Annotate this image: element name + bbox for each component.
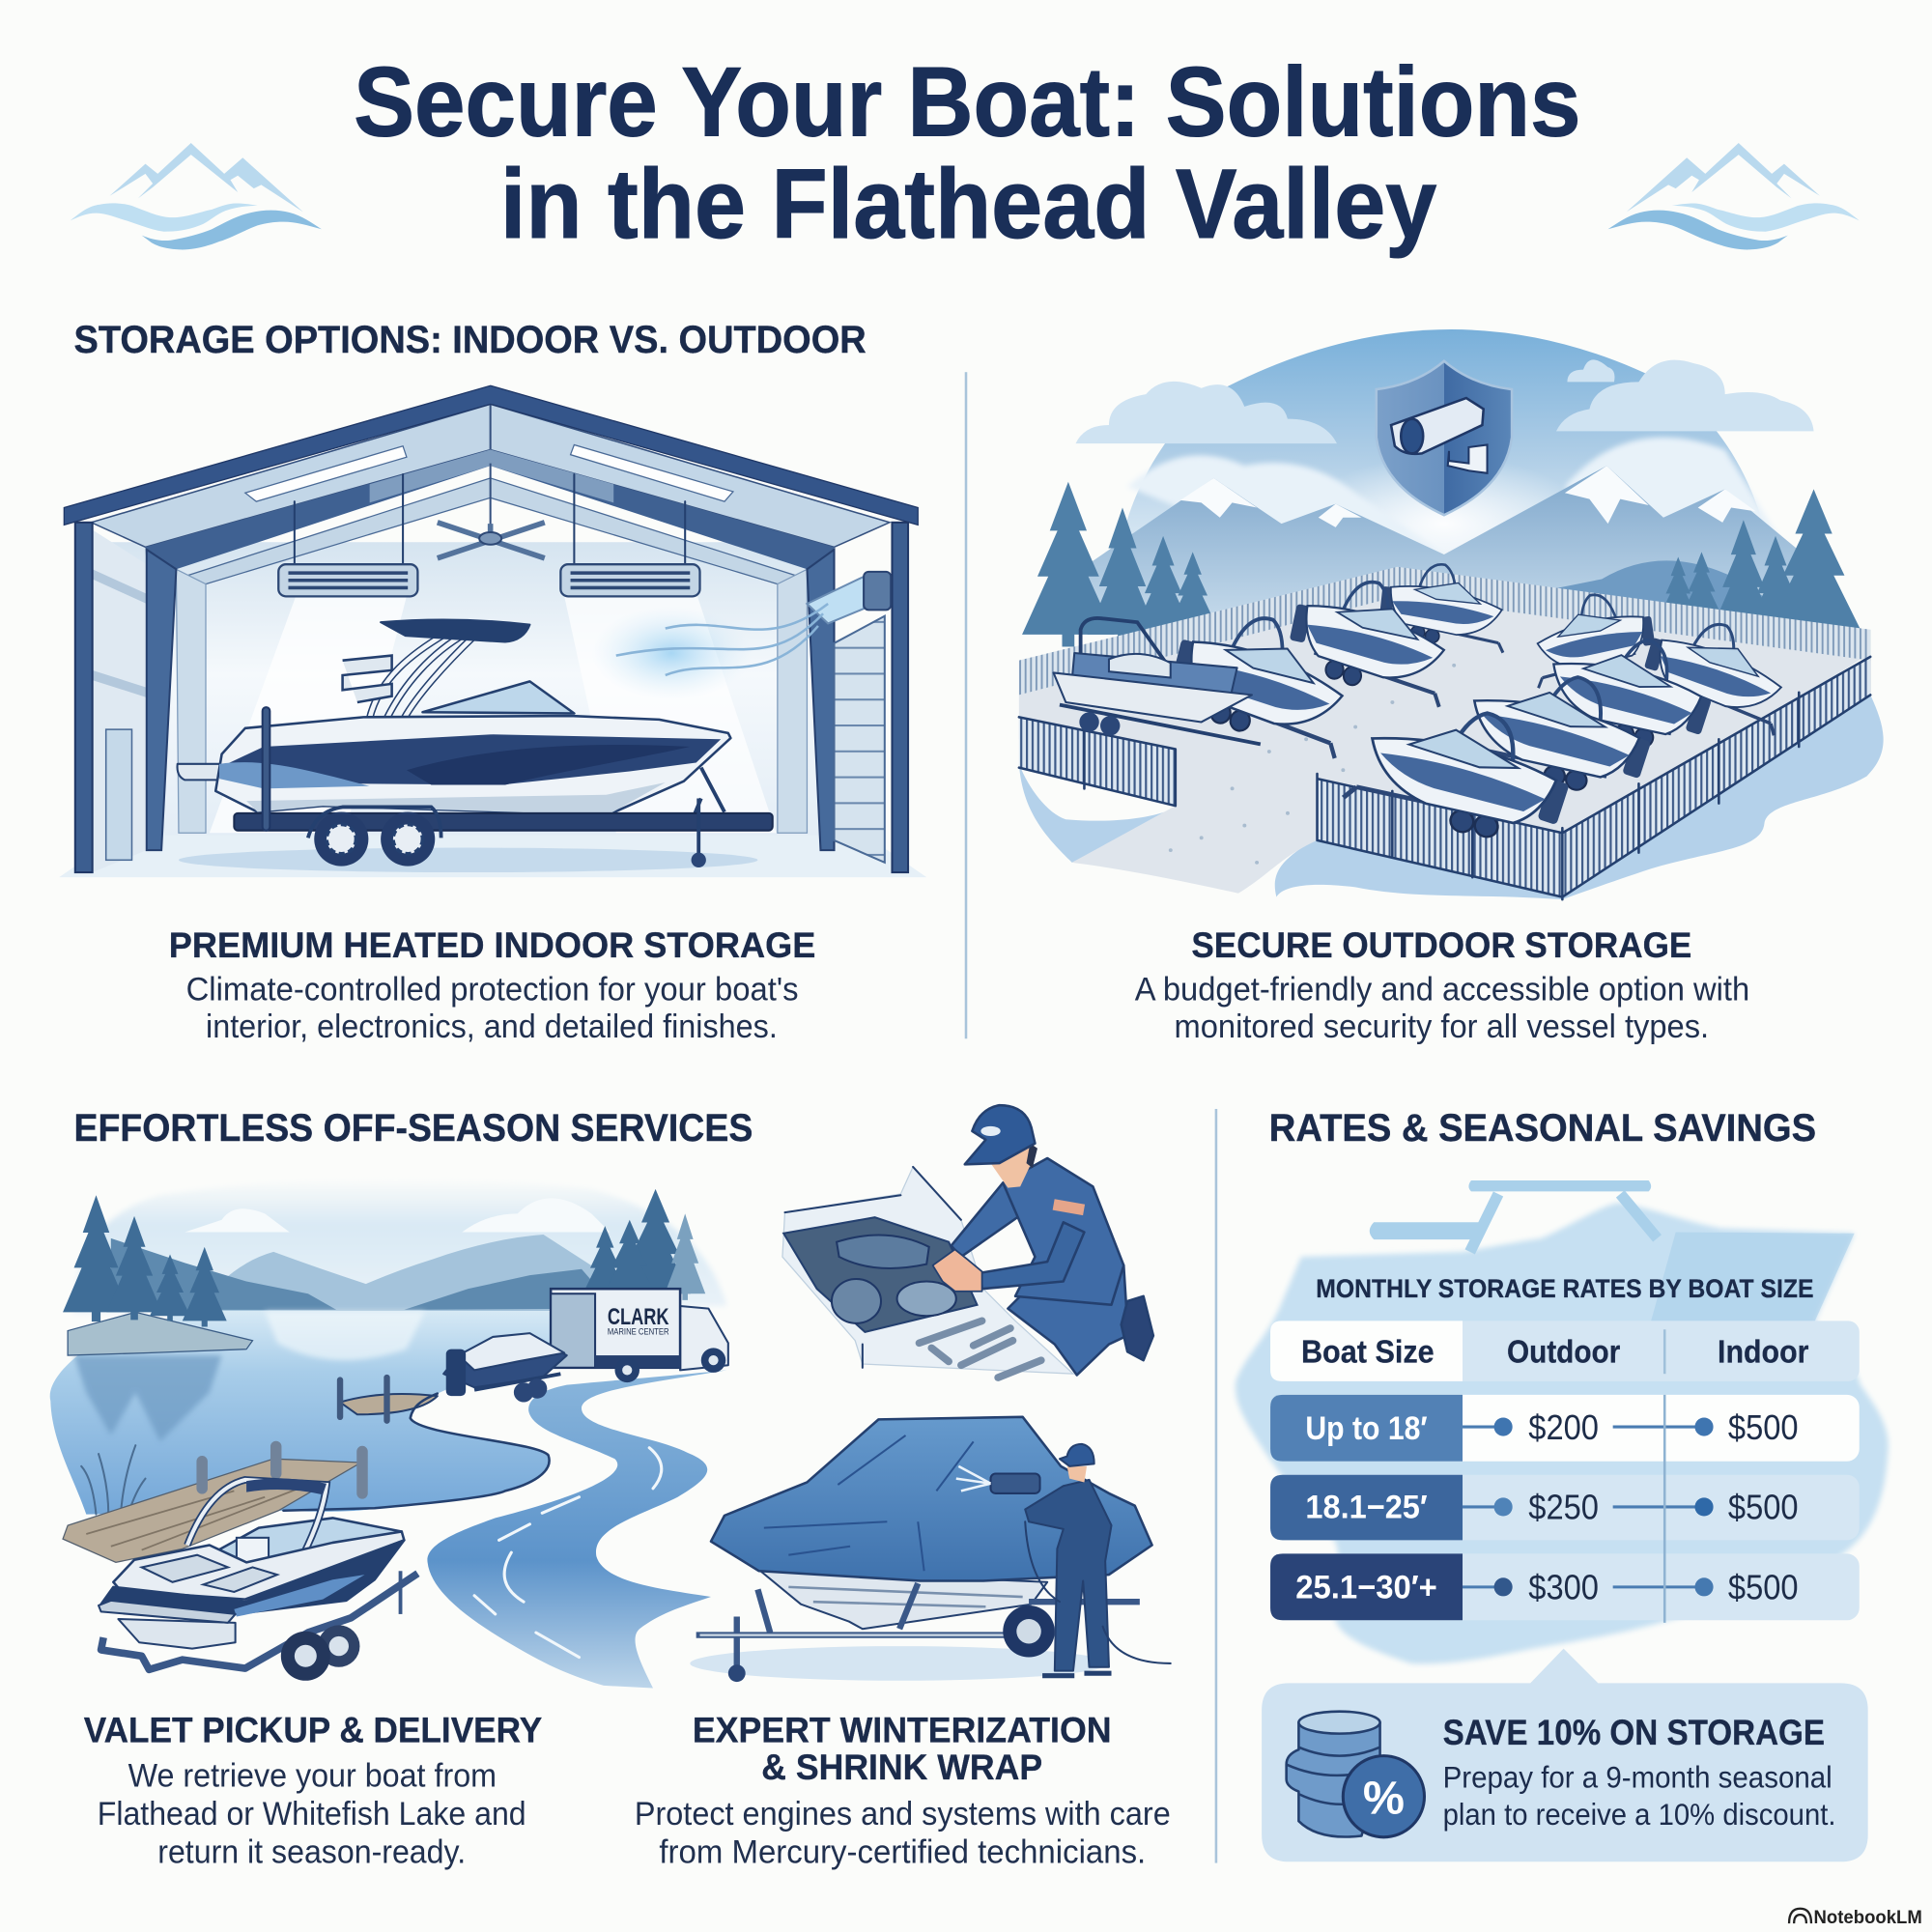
heading: rates and savings: RATES & SEASONAL SAVINGS — [1269, 1107, 1816, 1150]
side door — [106, 729, 131, 860]
fences — [1019, 567, 1397, 695]
near arm — [980, 1222, 1084, 1289]
illustration: valet pickup lake scene — [50, 1179, 728, 1688]
row: 18.1 to 25 ft: $250 — [1528, 1489, 1599, 1527]
floor shadow — [179, 848, 757, 872]
text: premium heated indoor storage: interior, electronics, and detailed finishes. — [206, 1009, 778, 1045]
clouds — [1127, 438, 1781, 554]
worker with heat gun — [956, 1444, 1112, 1678]
text: premium heated indoor storage: Climate-controlled protection for your boat's — [186, 972, 799, 1009]
boat on trailer — [178, 619, 773, 867]
icon: coins with percent badge — [1287, 1712, 1424, 1837]
text: valet pickup and delivery: We retrieve your boat from — [128, 1757, 497, 1794]
grass — [1019, 695, 1884, 899]
inner frame — [176, 478, 807, 584]
skylights — [245, 444, 733, 501]
text: expert winterization and shrink wrap — [635, 1711, 1171, 1871]
row: up to 18 ft: $500 — [1728, 1408, 1799, 1447]
row: up to 18 ft: $200 — [1528, 1408, 1599, 1447]
mountains — [1084, 466, 1811, 629]
text: expert winterization and shrink wrap: EXPERT WINTERIZATION — [693, 1711, 1112, 1750]
savings text: plan to receive a 10% discount. — [1443, 1797, 1836, 1832]
shield with security camera — [1377, 361, 1512, 515]
text: secure outdoor storage: SECURE OUTDOOR STORAGE — [1191, 925, 1691, 965]
roof — [64, 385, 918, 525]
reeds — [81, 1445, 146, 1515]
row: 25.1 to 30 ft plus: $500 — [1728, 1569, 1799, 1607]
savings text: Prepay for a 9-month seasonal — [1443, 1760, 1833, 1795]
title — [354, 46, 1580, 259]
sky — [74, 1179, 727, 1314]
columns — [75, 523, 93, 872]
watercolor boat backdrop — [1236, 1180, 1889, 1663]
big dock — [63, 1459, 361, 1562]
text: valet pickup and delivery: Flathead or Whitefish Lake and — [98, 1796, 526, 1833]
text: valet pickup and delivery — [84, 1711, 543, 1871]
icon: coins with percent badge: % — [1363, 1773, 1405, 1825]
air flow glow — [591, 607, 752, 699]
savings text: SAVE 10% ON STORAGE — [1443, 1713, 1825, 1752]
ceiling — [91, 404, 890, 547]
pontoon boat — [1054, 618, 1261, 744]
main boat on trailer — [99, 1479, 417, 1681]
tools — [920, 1321, 1041, 1378]
text: valet pickup and delivery: VALET PICKUP & DELIVERY — [84, 1711, 543, 1750]
illustration: secure outdoor storage lot — [1019, 329, 1884, 899]
AC unit — [807, 577, 864, 623]
trees — [1022, 482, 1860, 647]
face — [991, 1141, 1035, 1188]
divider — [965, 372, 967, 1038]
row: 25.1 to 30 ft plus — [1270, 1553, 1860, 1620]
text: expert winterization and shrink wrap: & SHRINK WRAP — [761, 1747, 1042, 1787]
far arm — [952, 1182, 1023, 1257]
ground — [1019, 591, 1870, 894]
cap — [965, 1105, 1035, 1164]
light cones from heaters — [210, 596, 407, 833]
small towed boat — [443, 1333, 567, 1403]
ceiling fan — [438, 523, 545, 558]
wrap cover — [711, 1417, 1152, 1580]
text: premium heated indoor storage — [169, 925, 815, 1045]
sky dome — [1115, 329, 1775, 579]
boot — [1122, 1296, 1153, 1360]
boats — [1378, 558, 1512, 653]
far mountains — [222, 1235, 616, 1311]
hull — [759, 1570, 1047, 1629]
divider — [1215, 1109, 1217, 1863]
row: 18.1 to 25 ft: $500 — [1728, 1489, 1799, 1527]
text: secure outdoor storage — [1135, 925, 1749, 1045]
heading: storage options: STORAGE OPTIONS: INDOOR VS. OUTDOOR — [74, 319, 867, 361]
heaters — [295, 474, 685, 564]
watermark: NotebookLM — [1814, 1908, 1922, 1928]
text: expert winterization and shrink wrap: from Mercury-certified technicians. — [659, 1834, 1146, 1871]
row: 18.1 to 25 ft: 18.1−25′ — [1305, 1489, 1428, 1525]
header row: Outdoor — [1507, 1335, 1620, 1371]
header row: Indoor — [1718, 1335, 1809, 1371]
text: expert winterization and shrink wrap: Protect engines and systems with care — [635, 1796, 1171, 1833]
engine bay — [783, 1217, 977, 1332]
text: secure outdoor storage: A budget-friendly and accessible option with — [1135, 972, 1749, 1009]
left wall — [93, 529, 147, 872]
trailer — [696, 1583, 1140, 1668]
heading: off-season services: EFFORTLESS OFF-SEASON SERVICES — [74, 1107, 753, 1150]
air flow lines — [616, 604, 828, 675]
boat deck — [782, 1167, 1073, 1374]
icon: mountain and waves left — [71, 143, 322, 249]
delivery truck: CLARK — [608, 1304, 669, 1330]
row: up to 18 ft — [1270, 1395, 1860, 1462]
header row: Boat Size — [1301, 1335, 1435, 1371]
title: in the Flathead Valley — [500, 149, 1436, 259]
row: 25.1 to 30 ft plus: $300 — [1528, 1569, 1599, 1607]
row: up to 18 ft: Up to 18′ — [1305, 1410, 1428, 1447]
road — [427, 1370, 727, 1688]
rates table with watercolor boat backdrop — [1236, 1180, 1889, 1663]
table title: MONTHLY STORAGE RATES BY BOAT SIZE — [1316, 1274, 1814, 1303]
torso — [1003, 1158, 1123, 1305]
roll-up door — [835, 616, 885, 863]
savings callout — [1262, 1649, 1868, 1861]
row: 18.1 to 25 ft — [1270, 1475, 1860, 1540]
shoreline — [283, 1394, 550, 1511]
island — [68, 1312, 252, 1355]
text: valet pickup and delivery: return it season-ready. — [157, 1834, 466, 1871]
main beam — [146, 450, 835, 569]
delivery truck — [551, 1289, 728, 1382]
small dock — [340, 1394, 438, 1414]
icon: mountain and waves right — [1608, 143, 1860, 249]
tree reflections — [74, 1355, 222, 1441]
illustration: shrink wrapped boat — [690, 1417, 1171, 1682]
illustration: heated indoor storage building — [59, 385, 926, 877]
text: premium heated indoor storage: PREMIUM HEATED INDOOR STORAGE — [169, 925, 815, 965]
text: secure outdoor storage: monitored security for all vessel types. — [1175, 1009, 1709, 1045]
savings text — [1443, 1713, 1836, 1832]
mechanic — [933, 1105, 1153, 1375]
leg — [1008, 1265, 1127, 1375]
header row — [1270, 1321, 1860, 1381]
trees — [63, 1189, 705, 1326]
forests — [111, 1238, 616, 1310]
title: Secure Your Boat: Solutions — [354, 46, 1580, 156]
illustration: mechanic working on engine — [782, 1105, 1153, 1378]
row: 25.1 to 30 ft plus: 25.1−30′+ — [1295, 1569, 1437, 1605]
delivery truck: MARINE CENTER — [608, 1326, 669, 1336]
lake — [50, 1311, 579, 1515]
hands — [933, 1249, 982, 1292]
